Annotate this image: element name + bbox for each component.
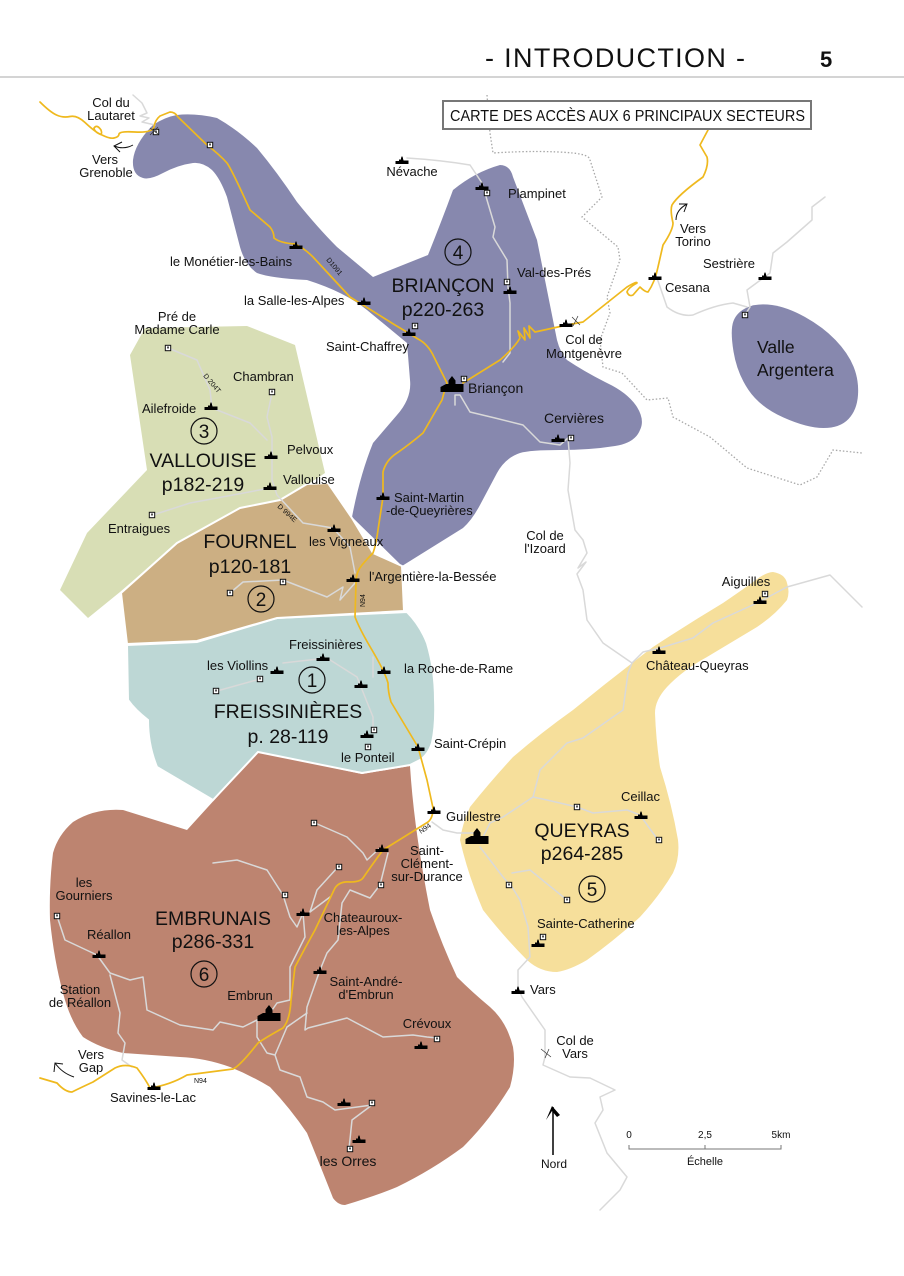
place names: north: Montgenèvre: [546, 346, 622, 361]
road: Lautaret: [133, 95, 155, 125]
place names: Vallouise and Fournel: Pelvoux: [287, 442, 334, 457]
road: Embrunais centre: [310, 867, 338, 912]
road: Fournel: [230, 580, 355, 600]
road: Sainte-Catherine branch: [512, 870, 567, 900]
scale bar: [626, 1130, 790, 1168]
sector label: Queyras: 5: [587, 880, 597, 901]
place names: north: Névache: [386, 164, 438, 179]
place names: Freissinières: le Ponteil: [341, 750, 395, 765]
place names: Embrunais: Saint-: [410, 843, 444, 858]
place names: north: Lautaret: [87, 108, 135, 123]
parking markers: [54, 129, 768, 1152]
sector label: Queyras: QUEYRAS: [534, 820, 630, 842]
road labels: N94: [418, 822, 433, 836]
main road N94: [40, 102, 447, 1092]
sector label: Fournel: FOURNEL: [203, 531, 297, 553]
place names: Queyras: Vars: [530, 982, 556, 997]
place names: Vallouise and Fournel: Pré de: [158, 309, 196, 324]
place names: Embrunais: Chateauroux-: [324, 910, 402, 925]
region: Queyras: [460, 572, 788, 972]
sector label: Embrunais: [155, 908, 271, 987]
place names: Vallouise and Fournel: Chambran: [233, 369, 294, 384]
place names: Embrunais: Embrun: [227, 988, 273, 1003]
sector label: Briançon: [392, 239, 494, 321]
sector label: Briançon: BRIANÇON: [392, 275, 494, 297]
road: to les Orres: [257, 1013, 372, 1149]
place names: Vallouise and Fournel: [108, 309, 496, 584]
place names: Vallouise and Fournel: Ailefroide: [142, 401, 196, 416]
place names: Queyras: l'Izoard: [524, 541, 566, 556]
arrow: to Gap: [54, 1063, 74, 1077]
place names: Freissinières: la Roche-de-Rame: [404, 661, 513, 676]
col markers: [150, 127, 580, 1058]
place names: Embrunais: d'Embrun: [338, 987, 394, 1002]
sector label: Embrunais: 6: [199, 965, 209, 986]
place names: Queyras: Col de: [556, 1033, 594, 1048]
sector label: Freissinières: [214, 667, 362, 748]
place names: Embrunais: Réallon: [87, 927, 131, 942]
road: Queyras: [483, 663, 632, 837]
villages: [92, 156, 772, 1143]
place names: Queyras: Vars: [562, 1046, 588, 1061]
road: Ceillac: [533, 797, 658, 840]
place names: Vallouise and Fournel: Entraigues: [108, 521, 171, 536]
road labels: N94: [194, 1078, 207, 1085]
place names: Queyras: Ceillac: [621, 789, 661, 804]
place names: Embrunais: Clément-: [401, 856, 453, 871]
place names: Queyras: Sainte-Catherine: [537, 916, 635, 931]
place names: Freissinières: Saint-Crépin: [434, 736, 506, 751]
road: Entraigues: [153, 488, 270, 515]
place names: Embrunais: Savines-le-Lac: [110, 1090, 196, 1105]
sector label: Vallouise: [150, 418, 256, 496]
place names: Vallouise and Fournel: Vallouise: [283, 472, 335, 487]
scale bar: Échelle: [687, 1155, 723, 1168]
sector label: Briançon: p220-263: [402, 299, 484, 321]
place names: Embrunais: Saint-André-: [330, 974, 402, 989]
place names: Embrunais: Vers: [78, 1047, 105, 1062]
road: Cesana: [657, 278, 747, 315]
road labels: N94: [360, 594, 367, 607]
place names: north: Saint-Chaffrey: [326, 339, 409, 354]
place names: north: Val-des-Prés: [517, 265, 592, 280]
place names: Queyras: Col de: [526, 528, 564, 543]
place names: Embrunais: Crévoux: [403, 1016, 452, 1031]
scale bar: 5km: [772, 1130, 790, 1141]
sector label: Queyras: [534, 820, 630, 902]
road: station de Réallon: [110, 975, 132, 1067]
place names: north: Plampinet: [508, 186, 566, 201]
road: Guillestre to Vars: [480, 847, 627, 1210]
road: to Crévoux: [305, 853, 437, 1038]
region: Briançon: [133, 114, 642, 566]
road: Névache to Briançon: [407, 158, 510, 362]
label: Valle Argentera: Argentera: [757, 360, 834, 380]
label: Valle Argentera: Valle: [757, 337, 795, 357]
sector label: Vallouise: p182-219: [162, 474, 244, 496]
map title box: CARTE DES ACCÈS AUX 6 PRINCIPAUX SECTEURS: [450, 108, 805, 125]
place names: north: [79, 95, 755, 518]
place names: Embrunais: les: [76, 875, 93, 890]
road: Chambran to l'Argentière: [267, 393, 355, 573]
sector label: Vallouise: VALLOUISE: [150, 450, 256, 472]
region: Valle Argentera: [732, 304, 858, 428]
place names: north: -de-Queyrières: [386, 503, 473, 518]
sector label: Queyras: p264-285: [541, 843, 623, 865]
road labels: D 204T: [201, 373, 222, 395]
dotted frontier: [487, 95, 862, 485]
place names: north: Sestrière: [703, 256, 755, 271]
place names: Vallouise and Fournel: l'Argentière-la-Bessée: [369, 569, 496, 584]
road labels: D 994E: [276, 503, 298, 524]
place names: Vallouise and Fournel: les Vigneaux: [309, 534, 384, 549]
sector label: Fournel: [203, 531, 297, 612]
towns: Briançon, Guillestre, Embrun: [258, 376, 488, 1021]
region: Fournel: [121, 483, 404, 644]
secondary roads: [57, 95, 862, 1210]
road: Embrunais north-east: [315, 823, 380, 860]
sector label: Freissinières: FREISSINIÈRES: [214, 700, 362, 723]
region: Embrunais: [50, 752, 514, 1205]
sector label: Vallouise: 3: [199, 422, 209, 443]
sector label: Freissinières: 1: [307, 671, 317, 692]
label: Valle Argentera: [757, 337, 834, 380]
place names: north: Saint-Martin: [394, 490, 464, 505]
road: Pré de Madame Carle: [168, 348, 267, 440]
region: Vallouise: [60, 326, 325, 618]
road: to Embrun: [270, 913, 305, 1013]
region: Freissinières: [127, 612, 435, 800]
place names: Queyras: [446, 528, 771, 1061]
place names: Queyras: Château-Queyras: [646, 658, 749, 673]
sector label: Briançon: 4: [453, 243, 464, 264]
place names: Embrunais: Gap: [79, 1060, 103, 1075]
place names: Embrunais: sur-Durance: [391, 869, 463, 884]
place names: north: Briançon: [468, 380, 523, 396]
heading: introduction: - INTRODUCTION -: [485, 43, 745, 73]
arrow: to Torino: [676, 204, 687, 220]
road: to Réallon: [57, 916, 257, 1030]
road labels: D1091: [324, 257, 343, 277]
map title box: [443, 101, 811, 129]
place names: north: le Monétier-les-Bains: [170, 254, 293, 269]
road: Sestrière: [745, 197, 825, 315]
place names: Freissinières: [207, 637, 513, 765]
place names: north: Cervières: [544, 410, 604, 426]
north arrow: Nord: [541, 1157, 567, 1171]
place names: north: Cesana: [665, 280, 711, 295]
sector label: Embrunais: EMBRUNAIS: [155, 908, 271, 930]
place names: north: la Salle-les-Alpes: [244, 293, 345, 308]
place names: Embrunais: [49, 843, 463, 1169]
place names: Freissinières: les Viollins: [207, 658, 269, 673]
place names: north: Torino: [675, 234, 711, 249]
place names: north: Grenoble: [79, 165, 133, 180]
road: Guillestre west: [432, 822, 473, 833]
north arrow: [541, 1106, 567, 1171]
place names: north: Col de: [565, 332, 603, 347]
sector label: Embrunais: p286-331: [172, 931, 254, 953]
scale bar: 0: [626, 1130, 632, 1141]
place names: Embrunais: Station: [60, 982, 100, 997]
place names: Vallouise and Fournel: Madame Carle: [134, 322, 220, 337]
place names: north: Vers: [92, 152, 119, 167]
sector label: Fournel: p120-181: [209, 556, 291, 578]
scale bar: 2,5: [698, 1130, 712, 1141]
place names: north: Col du: [92, 95, 130, 110]
road: Freissinières: [283, 657, 373, 728]
sector label: Freissinières: p. 28-119: [248, 726, 328, 748]
road: Embrunais north: [213, 860, 303, 927]
place names: north: Vers: [680, 221, 707, 236]
place names: Queyras: Guillestre: [446, 809, 501, 824]
page number: 5: [820, 47, 832, 72]
road: les Viollins: [217, 679, 260, 691]
place names: Embrunais: de Réallon: [49, 995, 111, 1010]
place names: Embrunais: les-Alpes: [336, 923, 390, 938]
place names: Queyras: Aiguilles: [722, 574, 771, 589]
road labels: [194, 257, 433, 1085]
road: Briançon to Izoard: [455, 395, 632, 663]
place names: Embrunais: Gourniers: [55, 888, 113, 903]
place names: Embrunais: les Orres: [320, 1153, 376, 1169]
sector label: Fournel: 2: [256, 590, 266, 611]
place names: Freissinières: Freissinières: [289, 637, 363, 652]
arrow: to Grenoble: [114, 142, 133, 152]
header rule: [0, 76, 904, 78]
road: Aiguilles: [632, 575, 862, 663]
main road to Torino: [463, 130, 708, 383]
